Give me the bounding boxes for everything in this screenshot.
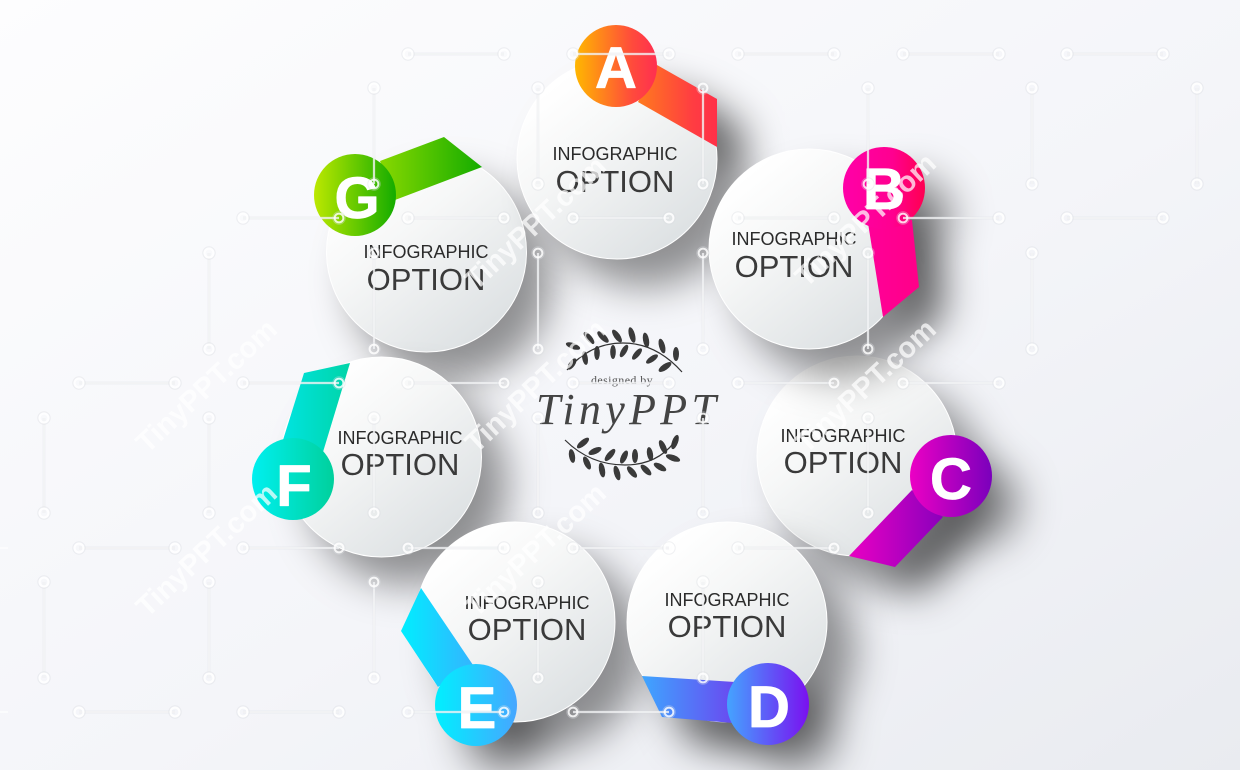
watermarks: TinyPPT.com — [459, 313, 613, 459]
logo: designed by TinyPPT: TinyPPT — [536, 385, 720, 434]
option D: D — [748, 675, 790, 740]
option E: E — [458, 676, 496, 741]
option B: INFOGRAPHIC — [731, 229, 857, 249]
watermarks — [130, 147, 943, 623]
watermarks: TinyPPT.com — [459, 150, 613, 296]
watermarks: TinyPPT.com — [130, 313, 284, 459]
option B: OPTION — [735, 249, 853, 284]
watermarks: TinyPPT.com — [789, 313, 943, 459]
option E — [401, 522, 643, 770]
option A: OPTION — [556, 164, 674, 199]
option F: OPTION — [341, 447, 459, 482]
option G: INFOGRAPHIC — [363, 242, 489, 262]
option C: INFOGRAPHIC — [780, 426, 906, 446]
option A: A — [595, 36, 637, 101]
option C: OPTION — [784, 445, 902, 480]
option F — [252, 357, 508, 585]
option D: OPTION — [668, 609, 786, 644]
option D — [627, 522, 855, 770]
option E: OPTION — [468, 612, 586, 647]
option F: F — [276, 454, 312, 519]
option A: INFOGRAPHIC — [552, 144, 678, 164]
option E: INFOGRAPHIC — [464, 593, 590, 613]
option A — [517, 25, 745, 287]
option F: INFOGRAPHIC — [337, 428, 463, 448]
option B: B — [863, 157, 905, 222]
option C: C — [930, 447, 972, 512]
option G: G — [334, 166, 380, 231]
option D: INFOGRAPHIC — [664, 590, 790, 610]
option B — [709, 147, 953, 377]
option C — [757, 356, 1020, 595]
watermarks: TinyPPT.com — [459, 477, 613, 623]
option G: OPTION — [367, 262, 485, 297]
watermarks: TinyPPT.com — [130, 477, 284, 623]
option G — [314, 137, 552, 380]
watermarks: TinyPPT.com — [789, 147, 943, 293]
logo: designed by TinyPPT: designed by — [591, 373, 653, 387]
logo: designed by TinyPPT — [536, 326, 720, 481]
